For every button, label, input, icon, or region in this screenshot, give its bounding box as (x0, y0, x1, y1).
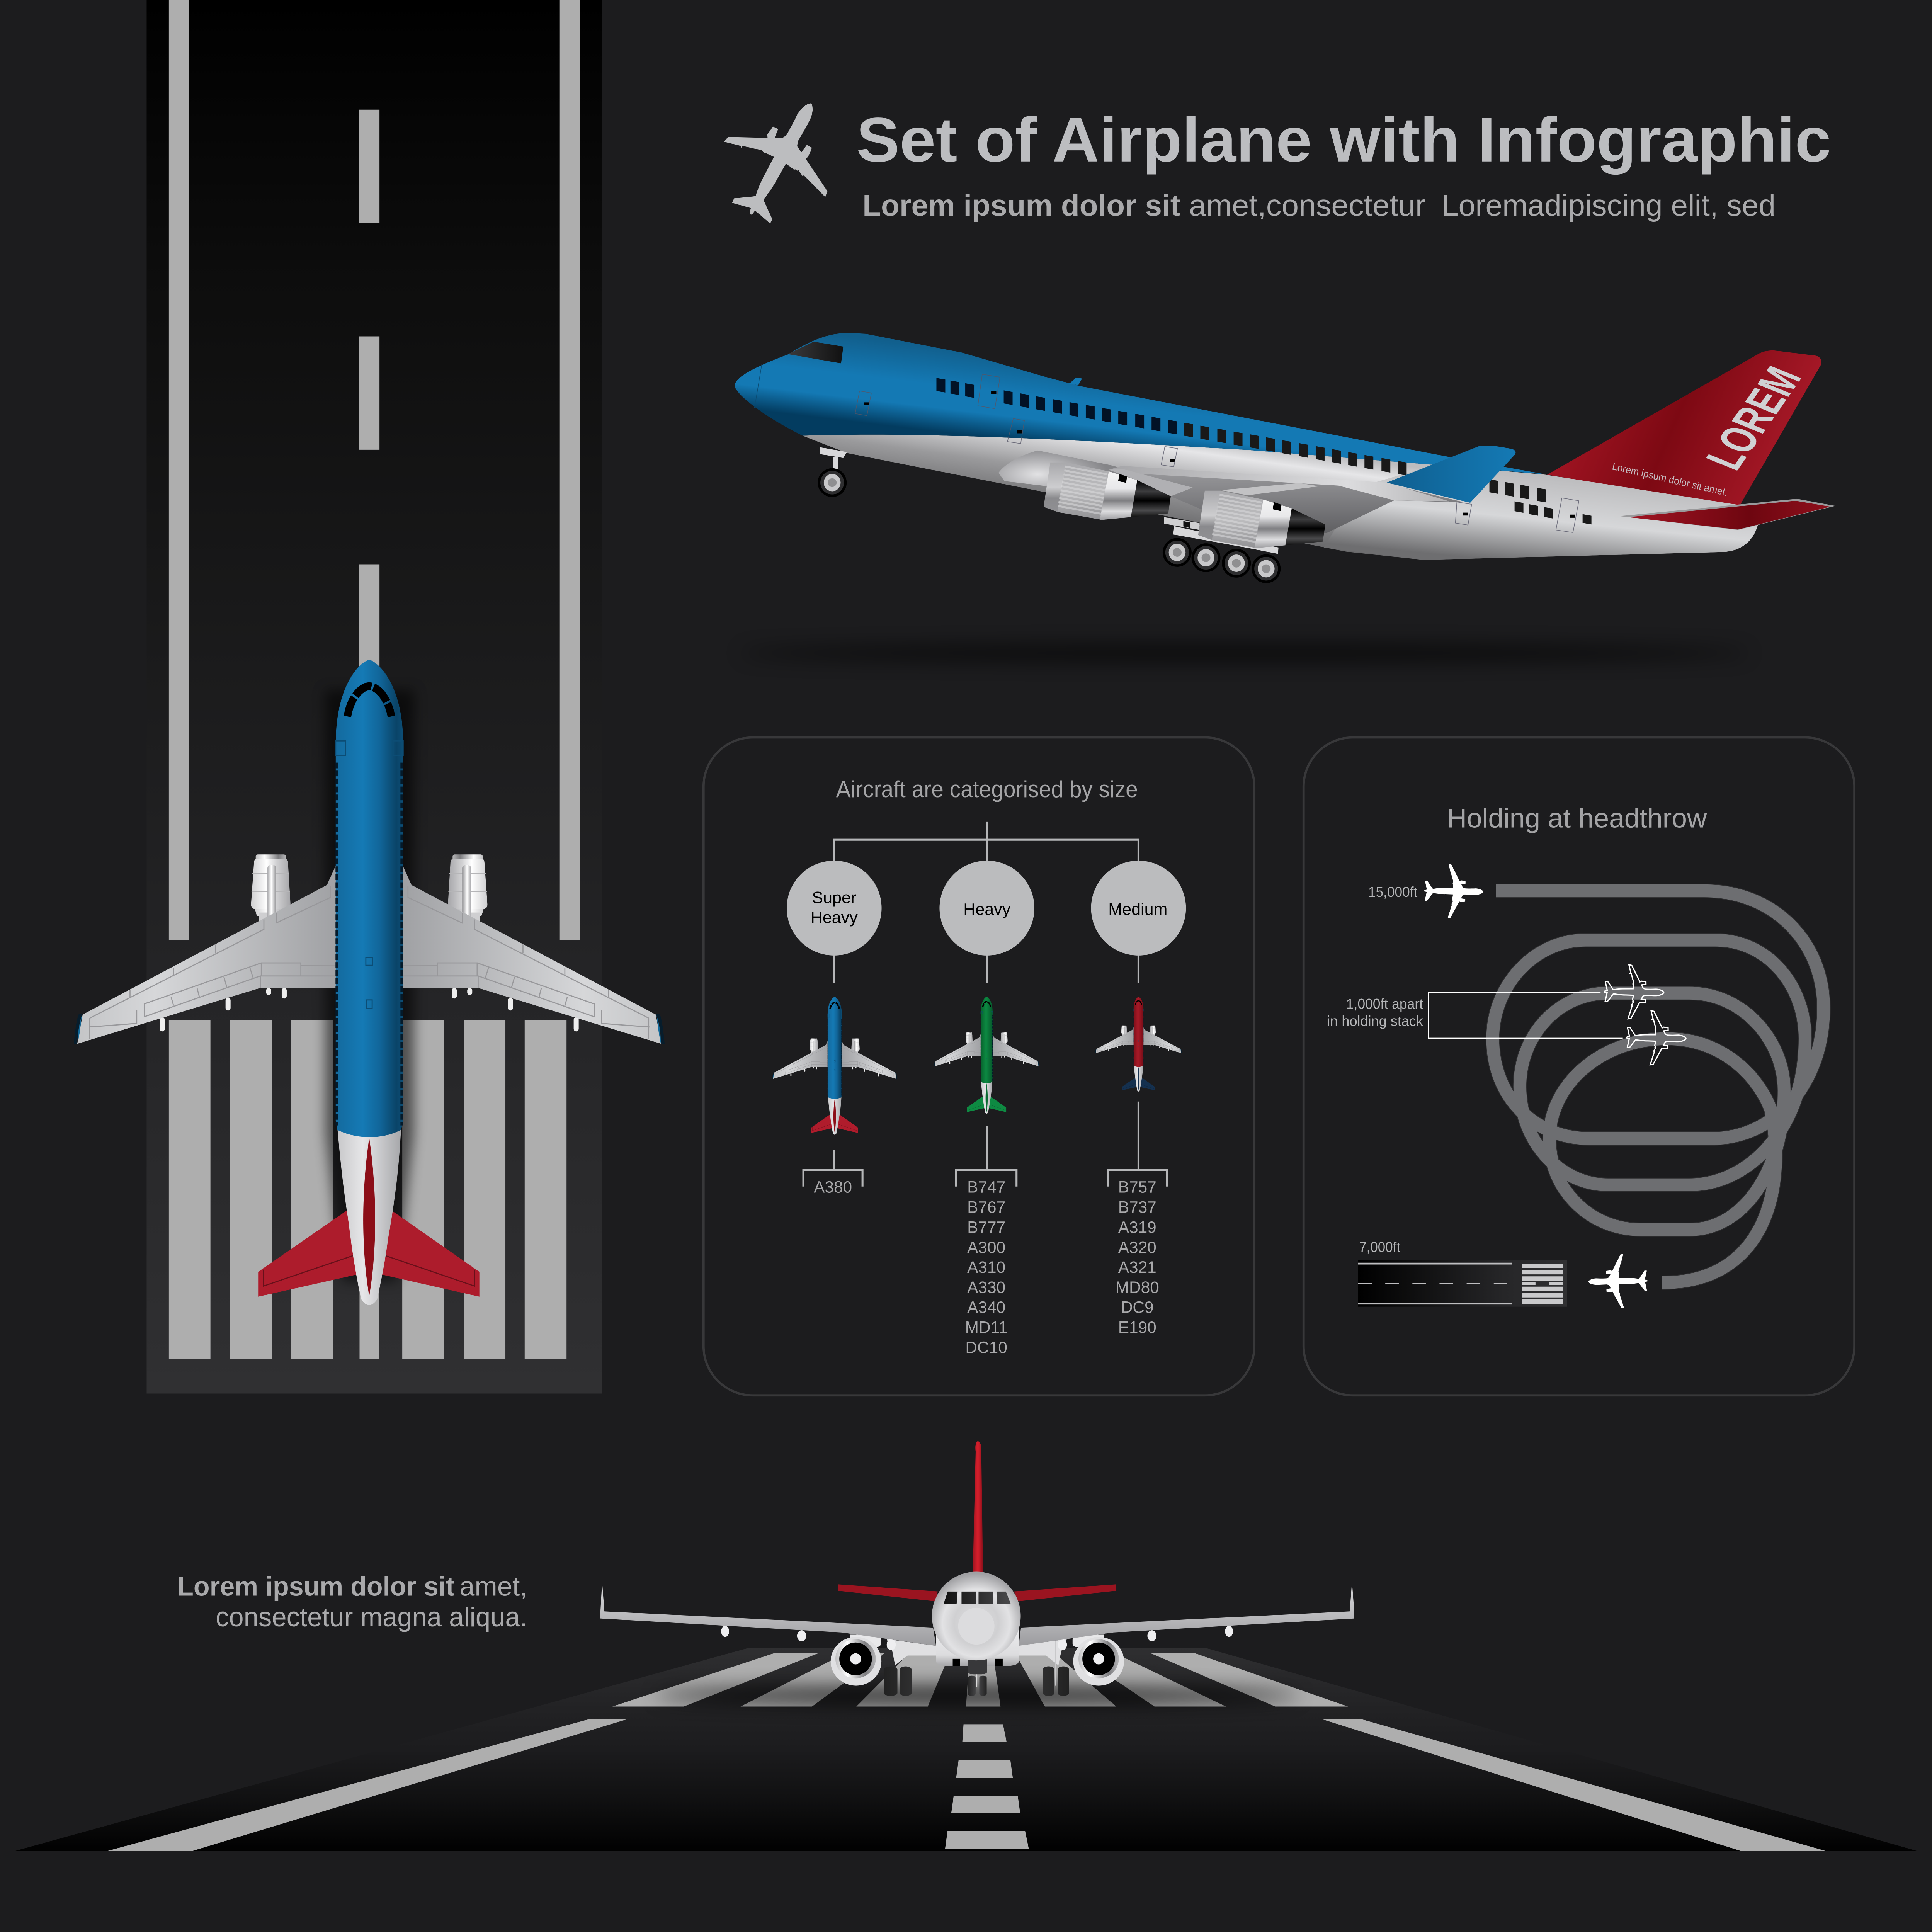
engine 1 (1044, 463, 1171, 520)
list: super heavy: A380 (814, 1178, 852, 1196)
runway edge lines (107, 1719, 1826, 1851)
list: medium: A321 (1118, 1258, 1156, 1276)
nose wheels (968, 1676, 987, 1696)
list: heavy (965, 1178, 1008, 1356)
list: heavy: MD11 (965, 1318, 1008, 1337)
windows rear (1184, 423, 1592, 524)
icon: airplane silhouette (724, 103, 827, 223)
cockpit window (788, 342, 843, 363)
subtitle (862, 188, 1776, 222)
door outlines (855, 374, 1579, 532)
runway centre dashes (945, 1724, 1029, 1849)
circle: super heavy: Heavy (811, 908, 858, 927)
caption text: consectetur magna aliqua. (216, 1602, 527, 1632)
wing struts (898, 1641, 1056, 1686)
list: heavy: B747 (967, 1178, 1005, 1196)
threshold stripes (612, 1653, 1348, 1706)
panel heading: Holding at headthrow (1447, 803, 1707, 833)
subtitle: Loremadipiscing elit, sed (1442, 188, 1776, 222)
panel: front-view runway (15, 1441, 1917, 1851)
engine 2 pylon (1221, 483, 1320, 495)
subtitle: Lorem ipsum dolor sit (862, 188, 1180, 222)
airplane side view (735, 333, 1835, 583)
plane shadow (325, 690, 414, 1281)
threshold stripes (169, 1020, 566, 1359)
fuselage (932, 1572, 1021, 1660)
label: 7,000ft: 7,000ft (1359, 1239, 1401, 1255)
nose wheel (818, 468, 847, 497)
circle: heavy: Heavy (963, 900, 1011, 919)
panel frame (704, 737, 1254, 1395)
horizontal stabiliser (1619, 499, 1835, 530)
engine 1 pylon (1109, 469, 1193, 496)
panel: holding stack (1304, 737, 1854, 1395)
windows front (936, 378, 1177, 434)
list: heavy: B777 (967, 1218, 1005, 1236)
stabilisers (838, 1584, 1116, 1601)
circle: medium: Medium (1108, 900, 1167, 919)
cockpit windows (944, 1592, 1011, 1604)
list: medium: MD80 (1116, 1278, 1159, 1296)
tail logo: LOREM (1695, 360, 1812, 476)
list: medium: DC9 (1121, 1298, 1154, 1316)
wings (600, 1582, 1354, 1646)
caption text: amet, (459, 1571, 527, 1601)
left engine (831, 1637, 881, 1686)
runway centre dashes (359, 110, 379, 690)
caption text (177, 1571, 527, 1632)
label: holding stack: 1,000ft apart (1346, 995, 1423, 1012)
circle: super heavy: Super (812, 888, 856, 907)
title: Set of Airplane with Infographic (856, 105, 1831, 175)
plane: medium (1095, 997, 1182, 1092)
caption text: Lorem ipsum dolor sit (177, 1571, 455, 1601)
label: 15,000ft: 15,000ft (1368, 884, 1418, 900)
plane ground shadow (654, 1687, 1300, 1704)
fuselage lower (803, 435, 1760, 560)
tail fin (973, 1441, 983, 1573)
list: heavy: B767 (967, 1198, 1005, 1216)
winglet (1387, 446, 1515, 503)
plane: 15,000ft (1415, 855, 1487, 925)
plane: stack lower (1617, 1002, 1690, 1071)
list: heavy: A300 (967, 1238, 1005, 1256)
list: medium: B737 (1118, 1198, 1156, 1216)
tree connectors (803, 822, 1167, 1187)
list: heavy: A310 (967, 1258, 1005, 1276)
circle: super heavy (787, 861, 882, 956)
wing leading edge (1109, 466, 1449, 502)
list: heavy: A340 (967, 1298, 1005, 1316)
panel: top-down runway (74, 0, 665, 1394)
gear doors (953, 1659, 1003, 1666)
nose strut (976, 1674, 977, 1687)
nose gear (820, 447, 847, 469)
plane: heavy (934, 997, 1039, 1114)
airplane front view (600, 1441, 1354, 1696)
panel frame (1304, 737, 1854, 1395)
holding track (1493, 891, 1823, 1283)
antenna (1069, 378, 1082, 385)
subtitle: amet,consectetur (1189, 188, 1425, 222)
main wheels (1163, 538, 1281, 583)
runway surface (15, 1648, 1917, 1851)
runway surface (146, 0, 602, 1394)
panel heading: Aircraft are categorised by size (836, 776, 1138, 802)
list: heavy: A330 (967, 1278, 1005, 1296)
label: holding stack: in holding stack (1327, 1013, 1423, 1029)
list: medium: A320 (1118, 1238, 1156, 1256)
pods (721, 1626, 1233, 1650)
mini runway (1358, 1260, 1567, 1307)
circle: medium (1091, 861, 1186, 956)
runway edge lines (169, 0, 580, 940)
pylons (887, 1639, 1067, 1665)
circle: heavy (939, 861, 1034, 956)
wing root fairing (998, 451, 1139, 507)
plane: stack upper (1595, 956, 1667, 1026)
label: holding stack (1327, 995, 1423, 1029)
tail fin (1547, 350, 1821, 506)
plane: 7,000ft (1585, 1245, 1657, 1315)
door handles (864, 391, 1575, 518)
stack bracket (1429, 992, 1623, 1038)
rear nacelles (850, 1635, 1104, 1647)
list: medium (1116, 1178, 1159, 1337)
right engine (1073, 1637, 1124, 1686)
tail caption: Lorem ipsum dolor sit amet. (1611, 461, 1729, 498)
list: heavy: DC10 (965, 1338, 1007, 1356)
list: medium: B757 (1118, 1178, 1156, 1196)
gear strut (1183, 521, 1190, 528)
engine 2 (1198, 491, 1325, 548)
gear block (1164, 517, 1200, 530)
nose seam (755, 363, 762, 408)
fuselage rear (1324, 465, 1760, 560)
main gear (1173, 526, 1279, 554)
belly (936, 1629, 1019, 1666)
panel: aircraft categories (704, 737, 1254, 1395)
list: medium: E190 (1118, 1318, 1156, 1337)
nose gear (968, 1659, 987, 1674)
airplane top view (74, 660, 665, 1305)
list: medium: A319 (1118, 1218, 1156, 1236)
main wheels (884, 1666, 1069, 1696)
wing underside (1128, 468, 1464, 533)
radome (958, 1608, 995, 1645)
fuselage upper blue (735, 333, 1546, 474)
plane: super heavy (772, 997, 897, 1135)
plane ground shadow (739, 646, 1750, 660)
